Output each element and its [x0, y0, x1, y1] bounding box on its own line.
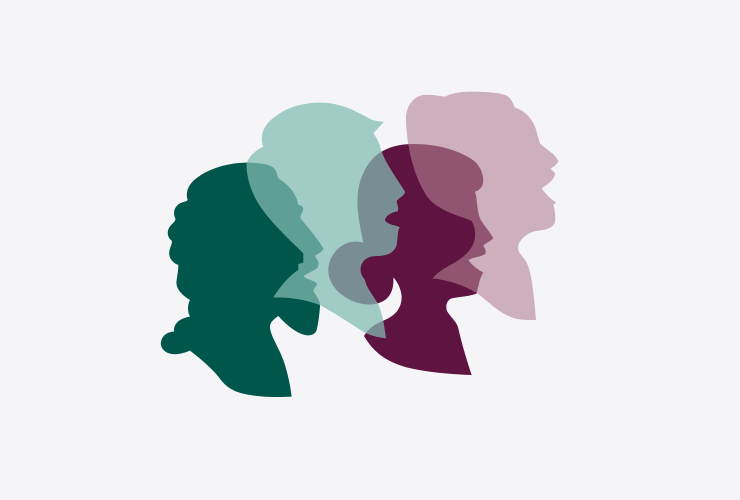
silhouette: dark purple head	[328, 144, 493, 375]
silhouette: light teal head	[247, 103, 405, 338]
silhouette: dark green head	[161, 163, 323, 397]
silhouette: light pink head	[406, 92, 558, 320]
